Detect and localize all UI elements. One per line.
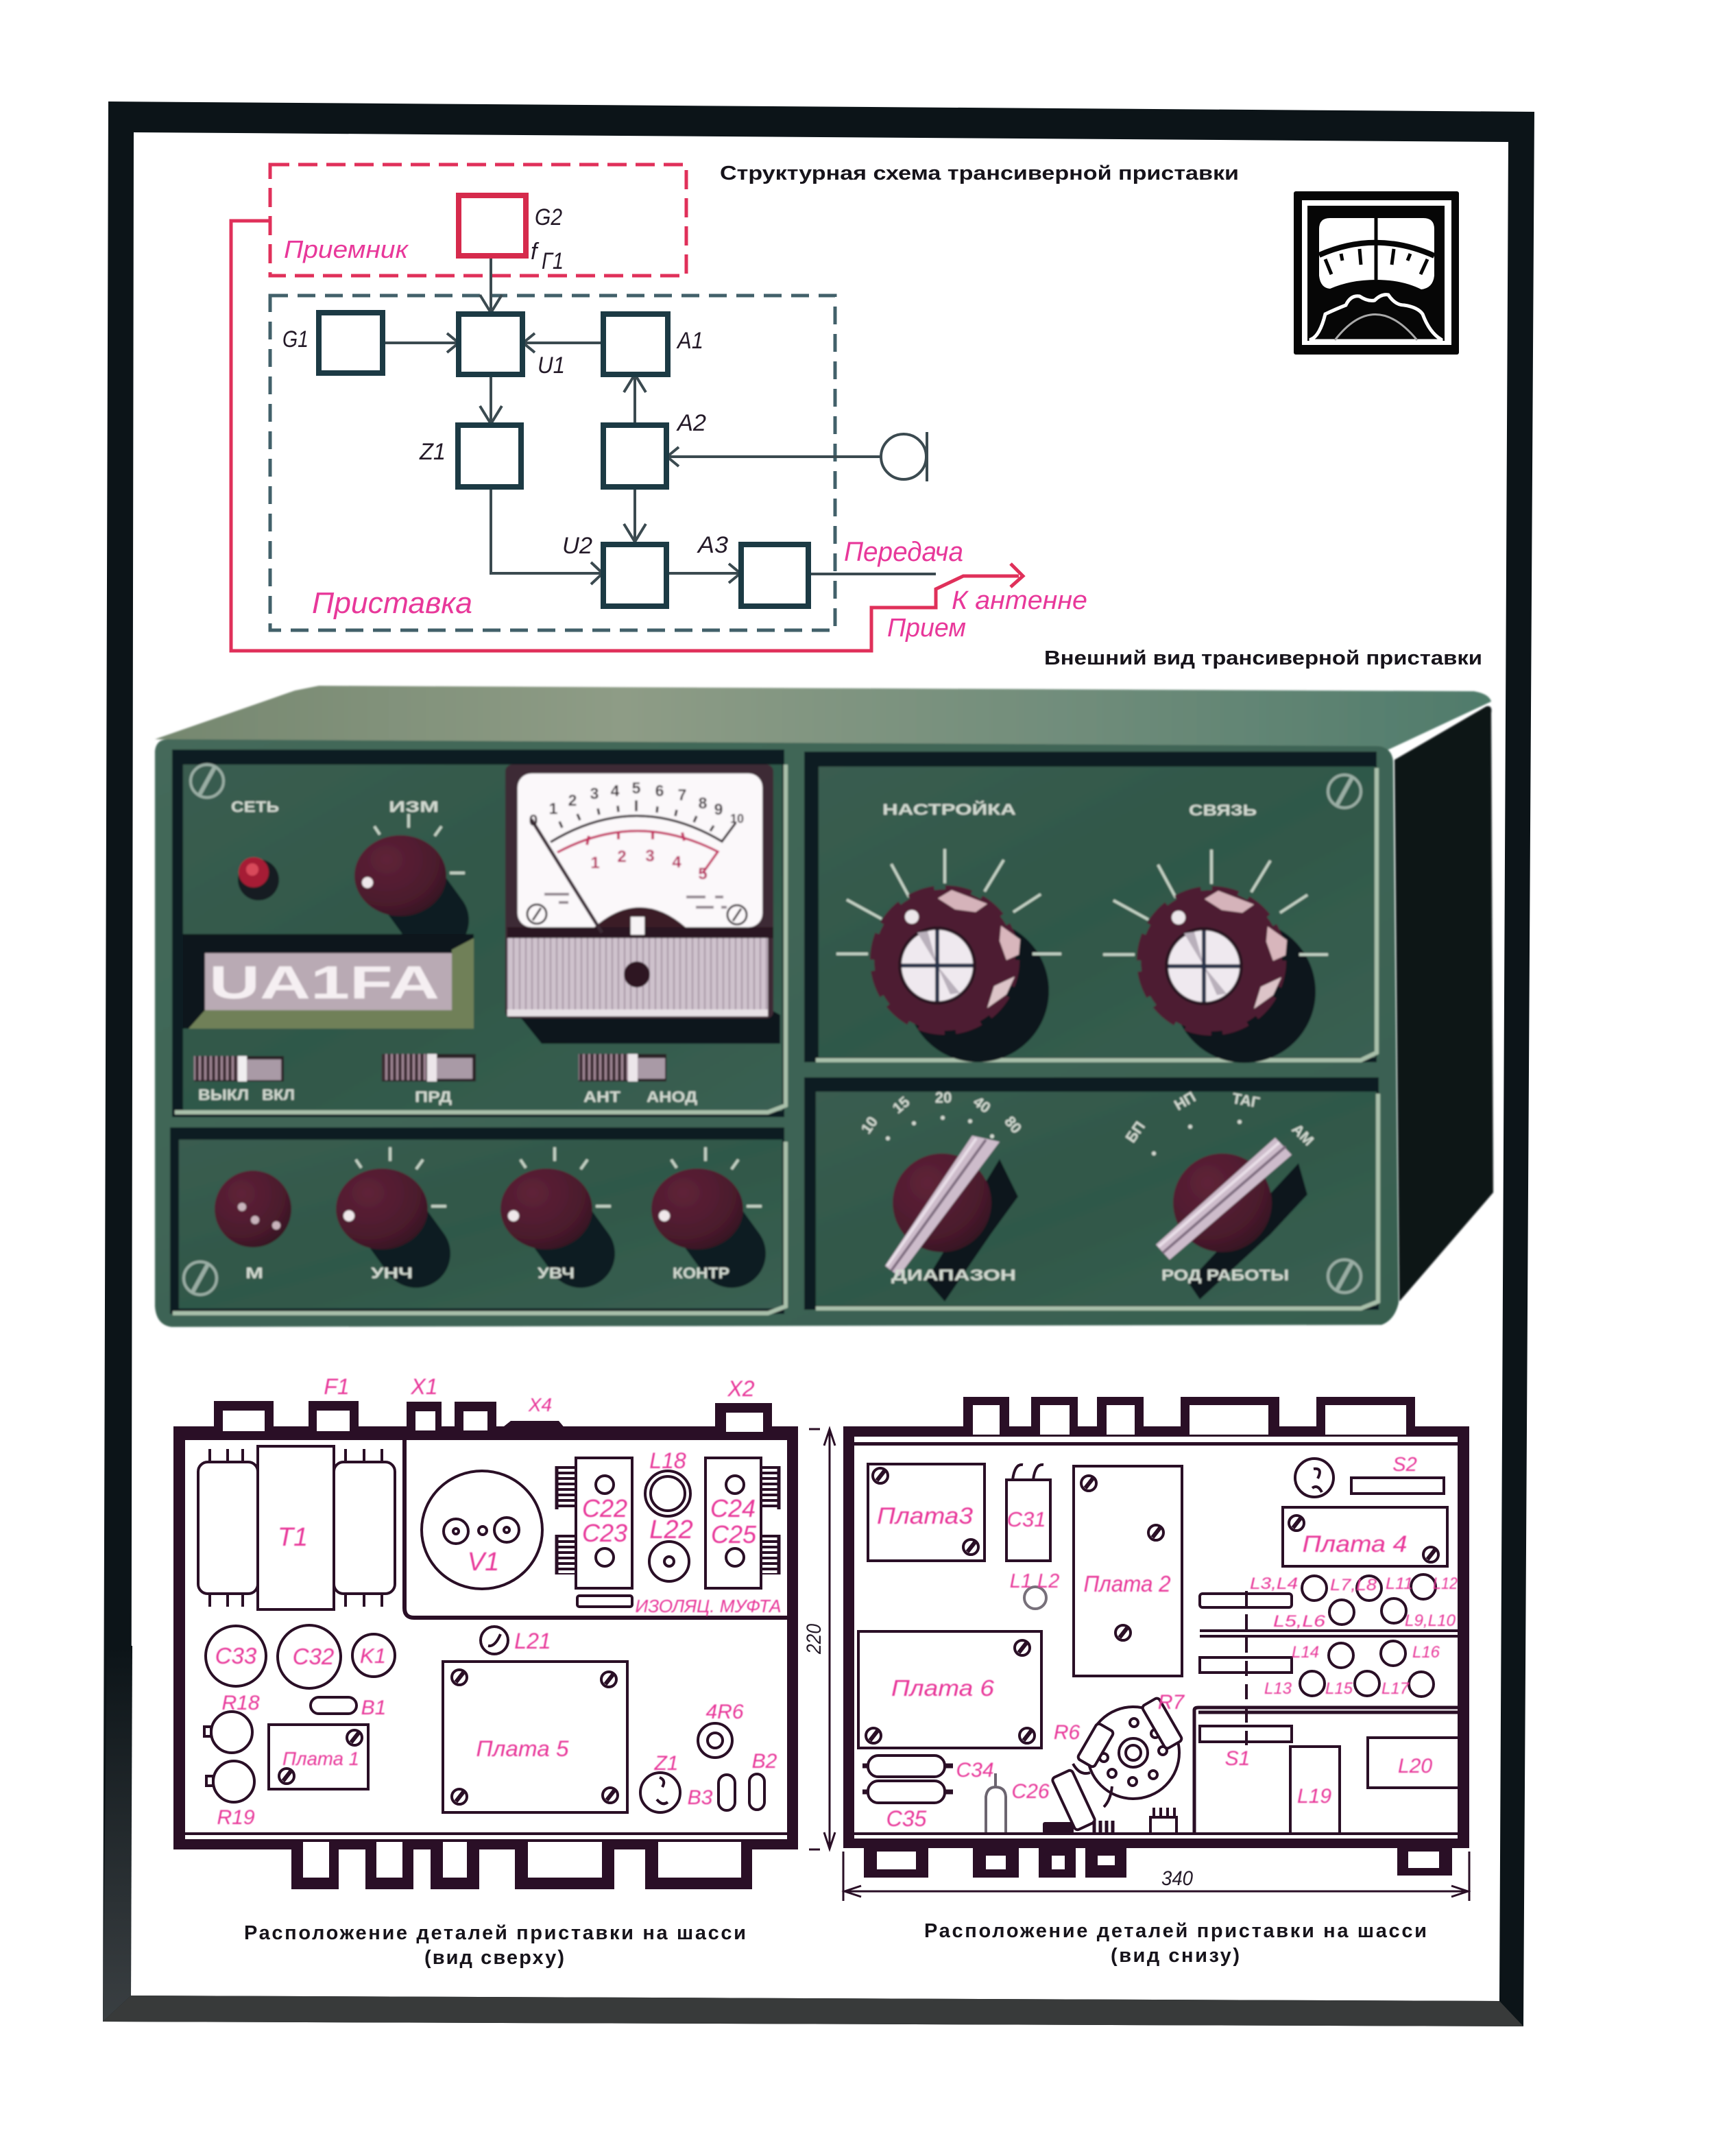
bottom view labels: L19 [1297, 1785, 1331, 1808]
top view labels: X1 [410, 1374, 438, 1399]
capacitor block C22 C23 [557, 1458, 632, 1588]
top view labels: K1 [360, 1644, 386, 1668]
knob: ИЗМ [354, 814, 465, 920]
signal lines [383, 256, 936, 574]
meter upper scale numbers: 1 [549, 800, 558, 817]
block: U1 [459, 314, 522, 374]
screw [1328, 775, 1361, 808]
bottom connector openings [303, 1842, 741, 1878]
switch: АНТ АНОД: АНТ [583, 1088, 621, 1105]
knob: УВЧ [500, 1147, 611, 1254]
top view labels [215, 1374, 782, 1829]
meter lower scale numbers: 2 [617, 848, 627, 866]
caption: top view: Расположение деталей приставки на шасси [244, 1922, 746, 1944]
top view labels: B2 [752, 1750, 777, 1773]
chassis outline [843, 1426, 1469, 1848]
panel: attachment dashed box [270, 296, 835, 630]
bottom view labels: L16 [1412, 1643, 1440, 1662]
dimension: 220 [803, 1429, 835, 1849]
pink labels: Приставка [312, 586, 472, 620]
control labels [245, 1265, 729, 1282]
band labels: 20 [935, 1089, 952, 1106]
top view labels: 4R6 [705, 1701, 744, 1723]
bottom view labels: L11 [1386, 1574, 1413, 1593]
band labels: 40 [970, 1093, 993, 1116]
L1 L2 coil [1024, 1587, 1046, 1609]
meter upper scale numbers: 2 [568, 791, 577, 809]
caption: bottom view [924, 1920, 1427, 1967]
panel: audio controls [170, 1127, 786, 1314]
top view labels: L22 [649, 1516, 693, 1544]
screw [1328, 1260, 1361, 1293]
screw [191, 765, 224, 798]
bottom view labels: L15 [1325, 1679, 1353, 1698]
control labels: М [245, 1265, 263, 1282]
label: ИЗМ: ИЗМ [389, 798, 439, 815]
4R6 [698, 1723, 732, 1758]
bottom view labels: L9,L10 [1405, 1612, 1456, 1630]
panel: tuning [804, 752, 1377, 1063]
top view labels: F1 [324, 1374, 350, 1399]
coil L22 [649, 1542, 689, 1581]
top view labels: L21 [514, 1629, 551, 1653]
knob: mode selector [1156, 1138, 1307, 1299]
switch: ВЫКЛ ВКЛ [194, 1056, 295, 1103]
block: A3 [741, 544, 808, 606]
bottom view labels: L7,L8 [1330, 1576, 1377, 1594]
bottom view labels: S2 [1392, 1454, 1417, 1476]
board 6 [858, 1631, 1041, 1748]
control labels: КОНТР [673, 1265, 729, 1282]
meter lower scale numbers: 1 [590, 854, 600, 872]
control labels: УВЧ [538, 1265, 575, 1282]
top view labels: T1 [278, 1523, 308, 1552]
top view labels: Z1 [653, 1752, 679, 1775]
bottom view labels: L13 [1264, 1679, 1292, 1698]
label: ДИАПАЗОН: ДИАПАЗОН [891, 1267, 1016, 1284]
R18 R19 [204, 1712, 254, 1802]
dimension: 220: 220 [803, 1624, 825, 1655]
tube V1 [422, 1471, 542, 1589]
shield divider [405, 1440, 787, 1618]
chassis outline [173, 1426, 798, 1849]
mode labels: НП [1171, 1088, 1198, 1114]
panel: band and mode [804, 1077, 1379, 1310]
band labels [858, 1089, 1025, 1137]
meter upper scale numbers: 4 [611, 782, 620, 800]
top view labels: V1 [468, 1548, 499, 1577]
caption: top view [244, 1922, 746, 1969]
caption: top view: (вид сверху) [424, 1947, 564, 1969]
label: НАСТРОЙКА: НАСТРОЙКА [882, 801, 1016, 818]
B3 B2 [719, 1774, 764, 1810]
meter upper scale numbers: 5 [632, 779, 641, 797]
bottom view labels: C34 [956, 1759, 994, 1782]
meter lower scale numbers: 3 [645, 847, 655, 865]
top connectors [963, 1397, 1415, 1428]
L19 [1290, 1747, 1340, 1832]
meter lower scale numbers: 5 [698, 865, 708, 883]
mode labels: ТАГ [1231, 1090, 1262, 1112]
top view labels: X4 [528, 1394, 552, 1415]
bottom view labels: Плата 4 [1303, 1531, 1407, 1557]
B1 [311, 1697, 357, 1714]
board 4 [1283, 1507, 1447, 1566]
block: A1 [603, 314, 668, 374]
pink labels: Приемник [284, 235, 409, 263]
bottom connectors [864, 1848, 1452, 1878]
capacitors C33 C32 K1 [206, 1625, 395, 1688]
top view labels: B1 [361, 1697, 386, 1719]
knob: КОНТР [651, 1147, 762, 1254]
meter upper scale numbers: 3 [590, 784, 599, 802]
Z1 [640, 1773, 680, 1812]
block labels: Г1 [542, 248, 564, 274]
block labels: A2 [676, 410, 706, 436]
icon: microphone [881, 432, 927, 481]
block labels: Z1 [419, 439, 446, 465]
top view labels: C23 [582, 1519, 627, 1547]
meter lower scale numbers: 4 [672, 853, 681, 872]
top connectors [214, 1401, 772, 1429]
label: СВЯЗЬ: СВЯЗЬ [1189, 802, 1257, 819]
device: transverter front view [155, 686, 1493, 1327]
tube socket [1295, 1459, 1333, 1497]
mode labels: БП [1122, 1118, 1148, 1146]
bottom view labels: Плата 2 [1083, 1571, 1171, 1596]
bottom view labels: L3,L4 [1250, 1574, 1298, 1593]
bottom connectors [291, 1849, 752, 1889]
top view labels: C22 [582, 1494, 627, 1522]
block labels: f [531, 239, 540, 265]
top surface [155, 686, 1491, 751]
switch: ВЫКЛ ВКЛ: ВКЛ [262, 1086, 295, 1103]
block labels: G2 [535, 204, 562, 230]
block: G2 [459, 195, 526, 256]
meter upper scale numbers: 9 [714, 800, 723, 818]
red receive line [231, 221, 1019, 651]
page frame [103, 101, 1534, 2026]
heading: block diagram: Структурная схема трансиверной приставки [720, 163, 1239, 184]
block labels [282, 204, 728, 559]
side surface [1395, 706, 1493, 1302]
bottom view labels: L12 [1433, 1574, 1458, 1593]
block labels: U1 [538, 352, 565, 379]
icon: meter emblem [1294, 191, 1459, 355]
heading: exterior view: Внешний вид трансиверной приставки [1044, 647, 1482, 669]
board 2 [1074, 1466, 1182, 1676]
band labels: 80 [1001, 1113, 1025, 1137]
block labels: A3 [697, 532, 728, 558]
shield [1194, 1708, 1458, 1832]
bottom view labels: C35 [886, 1806, 927, 1831]
screw [184, 1262, 217, 1295]
bottom view labels: L1 L2 [1010, 1570, 1059, 1592]
mode dots [1152, 1120, 1242, 1155]
switch S1 sections [1200, 1591, 1458, 1745]
knob: band selector [885, 1136, 1018, 1302]
top view labels: B3 [688, 1786, 713, 1809]
block labels: U2 [562, 533, 592, 559]
meter upper scale numbers: 8 [699, 794, 708, 812]
mode labels [1122, 1088, 1317, 1149]
microphone jack [215, 1171, 291, 1247]
top view labels: R18 [221, 1692, 260, 1714]
bottom view labels [877, 1454, 1458, 1831]
switch: АНТ АНОД [579, 1054, 697, 1105]
switch: ПРД [382, 1054, 476, 1105]
meter lower scale numbers [590, 847, 708, 883]
nameplate: UA1FA [183, 934, 474, 1029]
front body [155, 739, 1399, 1327]
top view labels: Плата 1 [282, 1748, 359, 1769]
capacitor C31 [1006, 1465, 1050, 1561]
band labels: 15 [889, 1093, 913, 1117]
switch: ВЫКЛ ВКЛ: ВЫКЛ [198, 1086, 249, 1103]
pink labels: К антенне [952, 586, 1087, 615]
block labels: A1 [676, 328, 703, 354]
top view labels: C32 [293, 1644, 334, 1669]
transformer T1 [198, 1446, 395, 1609]
bottom view labels: L20 [1398, 1755, 1432, 1777]
bottom view labels: C26 [1011, 1780, 1050, 1803]
arrow: to antenna [1011, 564, 1023, 587]
top view labels: C33 [215, 1643, 257, 1668]
bottom view labels: C31 [1007, 1507, 1046, 1531]
band labels: 10 [858, 1114, 881, 1137]
control labels: УНЧ [371, 1265, 413, 1282]
pink labels: Прием [887, 614, 966, 643]
capacitor C26 [986, 1773, 1006, 1832]
band dots [886, 1116, 994, 1140]
meter upper scale numbers: 7 [678, 786, 686, 804]
pink labels [284, 235, 1087, 643]
switch: ПРД: ПРД [415, 1088, 452, 1105]
caption: bottom view: Расположение деталей приставки на шасси [924, 1920, 1427, 1942]
block: G1 [319, 313, 383, 373]
indicator lamp [238, 857, 279, 900]
coil grid [1300, 1574, 1436, 1697]
dimension: 340 [843, 1852, 1469, 1901]
label: СЕТЬ: СЕТЬ [231, 798, 279, 815]
nameplate: UA1FA: UA1FA [209, 957, 439, 1009]
meter upper scale numbers: 6 [655, 782, 664, 800]
board 1 [269, 1725, 368, 1789]
bottom view labels: L17 [1381, 1679, 1410, 1698]
insulating sleeve [577, 1596, 632, 1607]
label: РОД РАБОТЫ: РОД РАБОТЫ [1161, 1267, 1289, 1284]
switch: АНТ АНОД: АНОД [647, 1088, 697, 1105]
bottom view labels: Плата3 [877, 1503, 973, 1529]
top view labels: ИЗОЛЯЦ. МУФТА [635, 1596, 782, 1616]
chassis interior [185, 1411, 787, 1839]
bottom view labels: L5,L6 [1273, 1612, 1326, 1631]
chassis bottom view [843, 1397, 1469, 1878]
knob: tuning [836, 849, 1061, 1062]
coil L18 [645, 1471, 690, 1516]
arrow heads [447, 295, 740, 584]
block labels: G1 [282, 326, 309, 352]
dimension: 340: 340 [1161, 1867, 1193, 1890]
capacitor block C24 C25 [705, 1458, 779, 1588]
meter upper scale numbers [529, 779, 744, 829]
S2 switch [1351, 1478, 1444, 1494]
board 5 [443, 1662, 627, 1812]
meter upper scale numbers: 10 [730, 812, 744, 826]
mode labels: АМ [1288, 1121, 1317, 1149]
caption: bottom view: (вид снизу) [1111, 1945, 1240, 1967]
bottom view labels: L14 [1292, 1643, 1319, 1662]
L21 [481, 1627, 508, 1654]
small connectors [1043, 1808, 1176, 1834]
meter [505, 765, 780, 1044]
knob: coupling [1103, 850, 1328, 1063]
block diagram [231, 165, 1087, 651]
bottom view labels: R7 [1158, 1691, 1185, 1714]
block: A2 [603, 425, 666, 487]
top view labels: C25 [711, 1520, 757, 1548]
capacitors C34 C35 [862, 1756, 953, 1803]
panel: power and meter [172, 750, 786, 1117]
top view labels: R19 [217, 1806, 255, 1829]
top view labels: X2 [727, 1376, 755, 1401]
bottom view labels: S1 [1225, 1747, 1250, 1770]
pink labels: Передача [844, 537, 963, 567]
meter upper scale numbers: 0 [529, 811, 538, 829]
block: U2 [603, 544, 666, 606]
knob: УНЧ [336, 1147, 446, 1254]
top view labels: L18 [649, 1448, 686, 1473]
L20 [1368, 1738, 1460, 1788]
chassis interior [854, 1405, 1458, 1838]
bottom view labels: Плата 6 [891, 1675, 995, 1701]
chassis top view [173, 1374, 798, 1889]
bottom view labels: R6 [1054, 1721, 1080, 1744]
block: Z1 [458, 425, 521, 487]
panel: receiver dashed box [270, 165, 686, 276]
top view labels: C24 [710, 1494, 756, 1522]
top view labels: Плата 5 [476, 1736, 569, 1761]
range switch with R6 R7 [1052, 1697, 1183, 1831]
board 3 [868, 1464, 985, 1561]
